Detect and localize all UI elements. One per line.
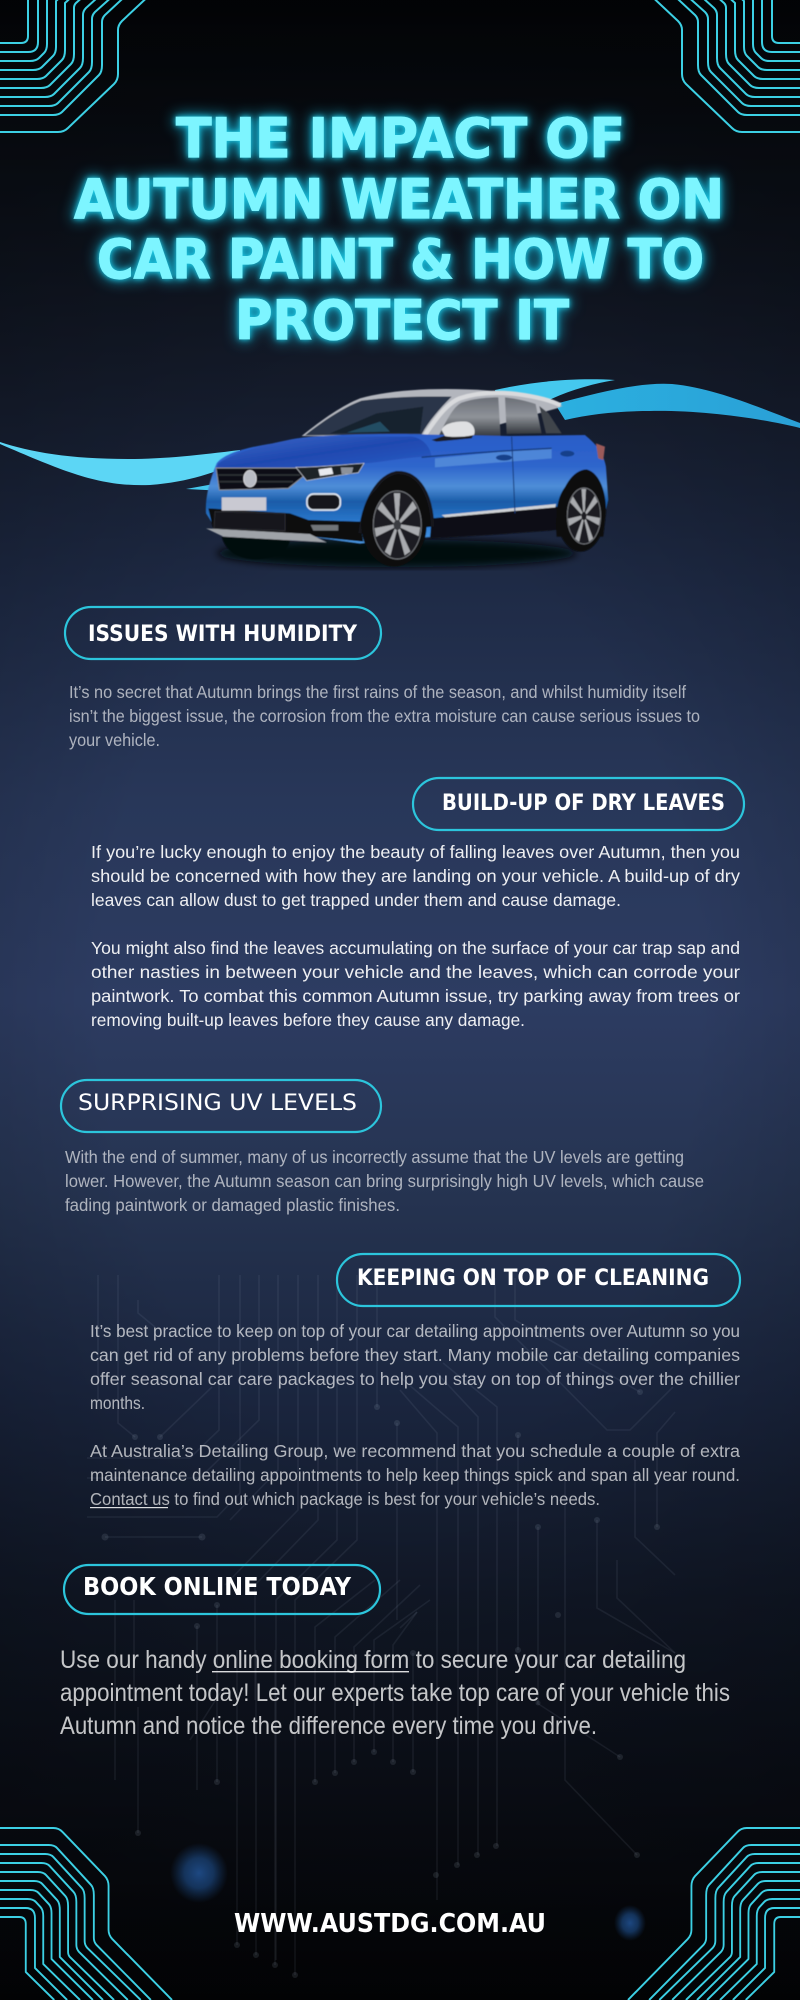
heading pill: dry leaves [413,778,744,830]
upper grille [216,468,305,490]
body text: dry leaves: paintwork. To combat this common Autumn issue, try parking away from trees or [91,986,740,1006]
swoosh: left light [0,442,240,485]
glow spot right [614,1905,646,1941]
body text: cleaning [90,1321,740,1509]
lower grille [214,512,285,531]
top left circuit corner [0,0,187,132]
silver lip [206,528,327,542]
body text: cleaning: months. [90,1393,145,1413]
body [206,434,608,543]
heading pill: dry leaves: BUILD-UP OF DRY LEAVES [442,791,725,816]
panel: issues with humidity [65,607,700,750]
fog lamp [307,494,340,510]
bottom left circuit corner [0,1828,172,2000]
body text: cleaning: It’s best practice to keep on top of your car detailing appointments over Autumn so you [90,1321,740,1341]
body text: booking call to action: Use our handy online booking form to secure your car detailing [60,1646,686,1674]
heading pill: cleaning: KEEPING ON TOP OF CLEANING [357,1266,709,1291]
heading pill: book online: BOOK ONLINE TODAY [83,1572,352,1601]
heading pill: issues with humidity: ISSUES WITH HUMIDITY [88,622,358,647]
body text: humidity: It’s no secret that Autumn brings the first rains of the season, and whilst humidity itself [69,682,686,702]
panel: surprising uv levels [61,1080,704,1215]
roof [302,389,563,437]
bottom right circuit corner [628,1828,800,2000]
panel: build-up of dry leaves [91,778,744,1030]
front bumper lower [208,508,363,542]
windshield [305,396,452,435]
swoosh: lower sliver [186,482,225,491]
body text: cleaning: can get rid of any problems before they start. Many mobile car detailing companies [90,1345,740,1365]
heading pill: book online [64,1565,380,1614]
title: THE IMPACT OF [176,107,625,170]
body text: dry leaves: other nasties in between your vehicle and the leaves, which can corrode your [91,962,740,982]
title [74,107,724,352]
body text: cleaning: maintenance detailing appointments to help keep things spick and span all year round. [90,1465,740,1485]
body text: dry leaves [91,842,740,1030]
car illustration [206,389,608,567]
body text: humidity [69,682,700,750]
link underline: online booking form [212,1671,409,1672]
body text: cleaning: Contact us to find out which package is best for your vehicle’s needs. [90,1489,600,1509]
licence plate [222,497,266,511]
mirror [432,421,475,442]
top right circuit corner [613,0,800,132]
circuit node dots [102,1389,660,1978]
body text: humidity: isn’t the biggest issue, the corrosion from the extra moisture can cause serious issues to [69,706,700,726]
rear wheel [557,478,605,552]
body text: cleaning: At Australia’s Detailing Group, we recommend that you schedule a couple of extra [90,1441,740,1461]
body text: booking call to action: Autumn and notice the difference every time you drive. [60,1712,597,1740]
tail light [596,443,605,460]
swoosh: upper light [495,379,615,410]
panel: book online today [60,1565,730,1740]
body text: dry leaves: removing built-up leaves before they cause any damage. [91,1010,525,1030]
circuit board background pattern [87,1275,675,1975]
body text: uv levels: lower. However, the Autumn season can bring surprisingly high UV levels, which cause [65,1171,704,1191]
website url footer: WWW.AUSTDG.COM.AU [234,1909,546,1939]
hood [217,437,432,468]
swoosh: right blue [555,384,800,428]
body text: dry leaves: should be concerned with how they are landing on your vehicle. A build-up of dry [91,866,740,886]
heading pill: uv levels: SURPRISING UV LEVELS [78,1091,357,1116]
title: AUTUMN WEATHER ON [74,168,724,231]
ground shadow [217,539,577,567]
badge [244,470,256,487]
fog detail [311,525,338,531]
white pillar and roof rail [425,393,561,435]
body text: humidity: your vehicle. [69,730,160,750]
side highlight [435,448,552,467]
title: CAR PAINT & HOW TO [97,228,704,291]
side windows [438,397,562,437]
headlight [296,463,364,481]
heading pill: uv levels [61,1080,381,1132]
front wheel arch [360,473,433,533]
silver sill [442,504,556,517]
far front tire [222,537,290,559]
rear wheel arch [556,469,606,537]
body text: dry leaves: If you’re lucky enough to enjoy the beauty of falling leaves over Autumn, then you [91,842,740,862]
body text: uv levels [65,1147,704,1215]
body text: booking call to action: appointment today! Let our experts take top care of your vehicle this [60,1679,730,1707]
body text: dry leaves: leaves can allow dust to get trapped under them and cause damage. [91,890,621,910]
body text: booking call to action [60,1646,730,1740]
body text: cleaning: offer seasonal car care packages to help you stay on top of things over the chillier [90,1369,740,1389]
title: PROTECT IT [235,289,569,352]
front wheel [361,483,427,567]
body text: uv levels: fading paintwork or damaged plastic finishes. [65,1195,400,1215]
body text: uv levels: With the end of summer, many of us incorrectly assume that the UV levels are getting [65,1147,684,1167]
heading pill: issues with humidity [65,607,381,659]
panel: keeping on top of cleaning [90,1254,740,1509]
lower door trim [430,507,560,538]
glow spot left [170,1843,228,1903]
link underline: contact us [90,1507,168,1508]
door seam and handles [422,437,574,513]
body text: dry leaves: You might also find the leaves accumulating on the surface of your car trap sap and [91,938,740,958]
heading pill: cleaning [337,1254,740,1306]
